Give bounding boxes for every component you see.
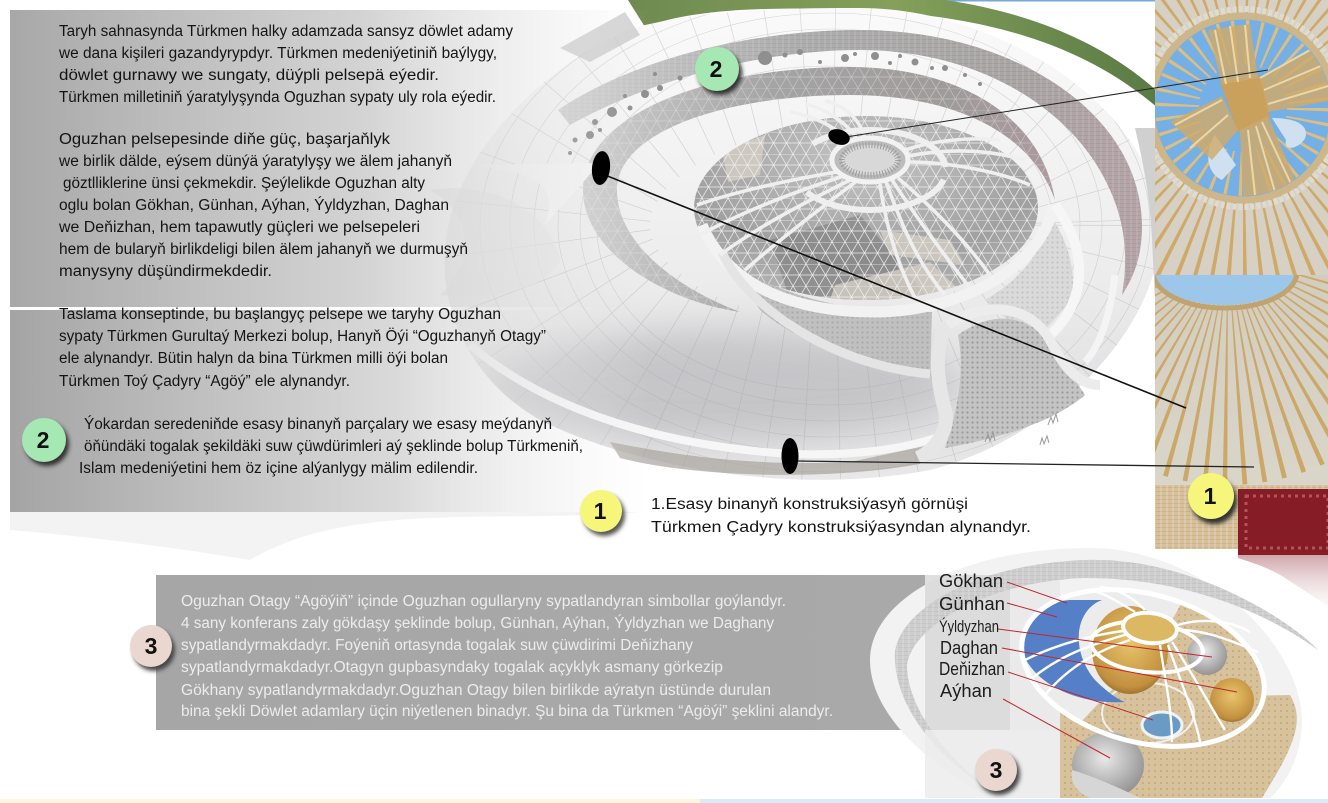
text block: history: döwlet gurnawy we sungaty, düýpli pelsepä eýedir. — [59, 67, 439, 84]
text block: symbols description: Gökhany sypatlandyrmakdadyr.Oguzhan Otagy bilen birlikde aýratyn üstünde durulan — [181, 682, 771, 699]
text block: design concept: sypaty Türkmen Gurultaý Merkezi bolup, Hanyň Öýi “Oguzhanyň Otagy” — [59, 327, 546, 345]
text block: symbols description: Oguzhan Otagy “Agöýiň” içinde Oguzhan ogullaryny sypatlandyran simbollar goýlandyr. — [181, 593, 786, 610]
text block: moon symbolism: Islam medeniýetini hem öz içine alýanlygy mälim edilendir. — [79, 460, 478, 477]
grass edge — [628, 0, 1158, 108]
entrance canopy — [918, 309, 1100, 458]
canopy mesh texture — [945, 319, 1085, 448]
main building rendering — [430, 0, 1170, 480]
ring interior — [1060, 605, 1262, 743]
text block: philosophy: Oguzhan pelsepesinde diňe güç, başarjaňlyk — [59, 131, 390, 148]
dome oculus — [832, 138, 908, 182]
marker dot: wall — [782, 438, 798, 474]
text block: history: we dana kişileri gazandyrypdyr. Türkmen medeniýetiniň baýlygy, — [58, 45, 497, 62]
text block: symbols description: sypatlandyrmakdadyr.Otagyn gupbasyndaky togalak açyklyk asmany görkezip — [181, 659, 723, 676]
plaza shading — [480, 330, 960, 440]
outer right ribbon — [1050, 205, 1079, 335]
badge 2 left — [22, 418, 69, 466]
model labels: Daghan — [940, 637, 998, 658]
outer ribbon ring — [722, 252, 930, 374]
text block: design concept: Türkmen Toý Çadyry “Agöý” ele alynandyr. — [59, 373, 350, 390]
dome ring — [702, 205, 1054, 312]
dark dome patches — [770, 215, 930, 300]
sphere band — [1072, 770, 1140, 798]
canopy left ribbon — [918, 325, 948, 458]
front terrace band — [610, 442, 925, 475]
badge 3 model: 3 — [990, 757, 1002, 783]
crown bundle center — [1220, 76, 1270, 132]
badge 1 right — [1188, 473, 1237, 524]
perforated outer band — [894, 560, 1318, 733]
divider highlight — [10, 307, 250, 309]
text block: symbols description — [181, 593, 833, 720]
text block: design concept: ele alynandyr. Bütin halyn da bina Türkmen milli öýi bolan — [59, 350, 448, 367]
text block: history — [58, 23, 513, 106]
yurt interior photo — [1155, 0, 1328, 604]
interior floor — [1109, 605, 1262, 698]
right perforated texture — [985, 215, 1073, 335]
lower rafters — [1155, 0, 1328, 275]
canopy top ribbon — [948, 309, 1100, 385]
model labels — [939, 570, 1005, 701]
lighter panel overlay on disc — [1010, 575, 1060, 730]
text block: symbols description: bina şekli Döwlet adamlary üçin niýetlenen binadyr. Şu bina da Türkmen “Agöýi” şeklini alandyr. — [181, 703, 833, 720]
marker dot: rafters — [590, 150, 612, 186]
dome lattice — [690, 110, 1040, 305]
model labels: Ýyldyzhan — [939, 617, 999, 636]
light dome patches — [722, 135, 970, 300]
marker dot: crown — [826, 126, 852, 148]
perforated star band — [568, 49, 982, 155]
outer grey ring band — [558, 30, 1142, 295]
badge 2 left: 2 — [37, 427, 49, 453]
panel: lower text background — [10, 310, 650, 512]
text block: philosophy: hem de bularyň birlikdeligi bilen älem jahanyň we durmuşyň — [59, 241, 468, 258]
badge 3 left — [130, 625, 175, 671]
bundle stripes — [1175, 25, 1328, 195]
outer ring lattice — [558, 30, 1142, 295]
outer white disc — [870, 548, 1302, 798]
text block: design concept: Taslama konseptinde, bu başlangyç pelsepe we taryhy Oguzhan — [59, 306, 501, 323]
left spur — [470, 163, 600, 225]
wall rafters — [1155, 275, 1328, 484]
crown interior — [1170, 24, 1328, 198]
gold sphere — [1210, 678, 1254, 722]
text block: moon symbolism: öňündäki togalak şekildäki suw çüwdürimleri aý şeklinde bolup Türkmeniň, — [84, 438, 583, 455]
text block: philosophy: manysyny düşündirmekdedir. — [59, 263, 272, 280]
lower shell texture — [728, 258, 932, 378]
model labels: Aýhan — [940, 680, 992, 701]
text block: philosophy: we Deňizhan, hem tapawutly güçleri we pelsepeleri — [58, 219, 420, 236]
grey sphere — [1072, 732, 1144, 798]
text block: design concept — [59, 306, 546, 390]
sky opening — [1153, 18, 1328, 198]
model labels: Günhan — [939, 593, 1005, 614]
yurt crown — [1155, 0, 1328, 275]
dome — [690, 110, 1040, 305]
pool — [1142, 712, 1182, 738]
plaza outer rim — [470, 345, 935, 454]
bottom edge strip — [0, 799, 1328, 803]
leader line: crown — [846, 70, 1268, 137]
carpet pattern — [1246, 496, 1328, 548]
window edge — [1155, 275, 1300, 310]
crescent lattice — [583, 67, 1055, 312]
band texture — [895, 560, 1316, 732]
model ribs — [1025, 587, 1258, 742]
crown spokes — [1177, 42, 1309, 174]
text block: construction note: 1.Esasy binanyň konstruksiýasyň görnüşi — [651, 496, 968, 513]
text block: symbols description: sypatlandyrmakdadyr. Foýeniň ortasynda togalak suw çüwdirimi Deňizhany — [181, 637, 693, 654]
text block: construction note — [651, 496, 1031, 536]
model oculus — [1122, 610, 1178, 646]
model plan rendering — [870, 548, 1318, 798]
white sphere — [1187, 635, 1227, 675]
badge 3 left: 3 — [145, 633, 157, 659]
circular plaza — [444, 8, 1160, 480]
text block: moon symbolism — [79, 416, 583, 477]
badge 2 top — [695, 47, 742, 95]
text block: moon symbolism: Ýokardan seredeniňde esasy binanyň parçalary we esasy meýdanyň — [84, 416, 552, 433]
text block: history: Türkmen milletiniň ýaratylyşynda Oguzhan sypaty uly rola eýedir. — [59, 89, 496, 106]
main gold dome — [1092, 606, 1168, 694]
badge 1 center: 1 — [594, 498, 607, 524]
clouds — [1208, 118, 1306, 180]
model second ring — [1089, 616, 1205, 678]
dome ribs — [697, 101, 1030, 300]
far right ribbon — [1085, 275, 1115, 362]
model lower overlay — [925, 730, 1060, 798]
panel: upper text background — [10, 10, 650, 307]
text block: philosophy: oglu bolan Gökhan, Günhan, Aýhan, Ýyldyzhan, Daghan — [59, 197, 449, 214]
badge 3 model — [975, 749, 1020, 795]
top blue edge line — [945, 0, 1155, 2]
lattice texture — [1155, 485, 1328, 549]
text block: philosophy — [58, 131, 468, 280]
lattice band — [1155, 485, 1328, 549]
right perforated shell — [985, 215, 1073, 335]
dome secondary ring — [794, 130, 946, 210]
callout lines: model labels — [998, 582, 1237, 758]
text block: philosophy: we birlik dälde, eýsem dünýä ýaratylyşy we älem jahanyň — [58, 153, 452, 170]
sky window — [1156, 275, 1294, 305]
grass tufts — [985, 414, 1058, 445]
top-left road — [560, 12, 640, 62]
pool ring floor — [1102, 683, 1194, 743]
lower perforated shell — [728, 258, 932, 378]
white inner floor — [1026, 592, 1180, 720]
model labels: Deňizhan — [939, 658, 1005, 679]
badge 2 top: 2 — [710, 56, 722, 82]
badge 1 center — [580, 490, 625, 536]
text block: philosophy: göztlliklerine ünsi çekmekdir. Şeýlelikde Oguzhan alty — [63, 175, 425, 192]
blue shell — [1020, 600, 1125, 702]
yurt wall — [1155, 275, 1328, 549]
model main ring — [1004, 564, 1282, 772]
upper connector shade — [1135, 128, 1155, 300]
left circular stair — [430, 188, 560, 296]
text block: symbols description: 4 sany konferans zaly gökdaşy şeklinde bolup, Günhan, Aýhan, Ýyldyzhan we Daghany — [181, 615, 774, 632]
plaza lattice grid — [480, 0, 1170, 472]
crown ring — [1151, 16, 1328, 200]
inner grey crescent band — [583, 67, 1055, 312]
model labels: Gökhan — [939, 570, 1003, 591]
red carpet — [1238, 489, 1328, 555]
crown bundle arms — [1170, 24, 1328, 198]
panel: description background — [156, 575, 925, 730]
carpet fade — [1238, 555, 1328, 606]
badge 1 right: 1 — [1204, 483, 1217, 509]
sand floor — [1060, 695, 1297, 798]
light panel overlay on disc — [925, 575, 1010, 730]
canopy mesh — [945, 319, 1085, 448]
leader line: wall — [795, 461, 1254, 467]
crown ring inner edge — [1144, 9, 1328, 207]
leader line: rafters — [605, 175, 1186, 408]
bottom left swoosh — [10, 512, 640, 560]
text block: construction note: Türkmen Çadyry konstruksiýasyndan alynandyr. — [651, 519, 1031, 536]
text block: history: Taryh sahnasynda Türkmen halky adamzada sansyz döwlet adamy — [59, 23, 513, 40]
